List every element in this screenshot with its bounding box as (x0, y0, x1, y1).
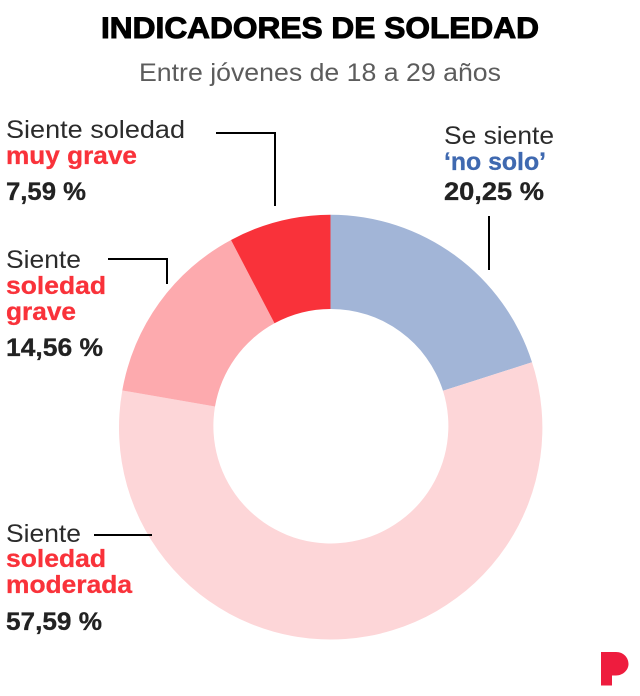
label: no solo: 20,25 % (444, 178, 544, 206)
label: muy grave: 7,59 % (6, 178, 86, 206)
label: muy grave: muy grave (6, 142, 137, 170)
subtitle: Entre jóvenes de 18 a 29 años (139, 59, 501, 87)
label: no solo: Se siente (444, 122, 554, 150)
label: moderada: soledad (6, 545, 106, 573)
connector: no solo (488, 216, 490, 270)
segment: no solo (330, 215, 532, 391)
label: grave: Siente (6, 246, 81, 274)
label: muy grave: Siente soledad (6, 116, 185, 144)
connector: grave (108, 259, 167, 284)
label: grave: grave (6, 298, 76, 326)
title: INDICADORES DE SOLEDAD (101, 12, 539, 45)
connector: moderada (94, 534, 152, 536)
icon: P logo (601, 652, 628, 686)
label: no solo (444, 122, 554, 206)
segment: grave (122, 240, 274, 406)
label: grave: soledad (6, 272, 106, 300)
label: moderada: Siente (6, 520, 81, 548)
connector: muy grave (216, 133, 275, 206)
label: grave (6, 246, 106, 362)
label: grave: 14,56 % (6, 334, 103, 362)
label: moderada: 57,59 % (6, 608, 102, 636)
label: no solo: ‘no solo’ (444, 148, 546, 176)
donut chart (119, 215, 542, 640)
label: moderada (6, 520, 133, 636)
label: moderada: moderada (6, 571, 133, 599)
segment: moderada (119, 362, 542, 640)
segment: muy grave (231, 215, 330, 323)
label: muy grave (6, 116, 185, 206)
